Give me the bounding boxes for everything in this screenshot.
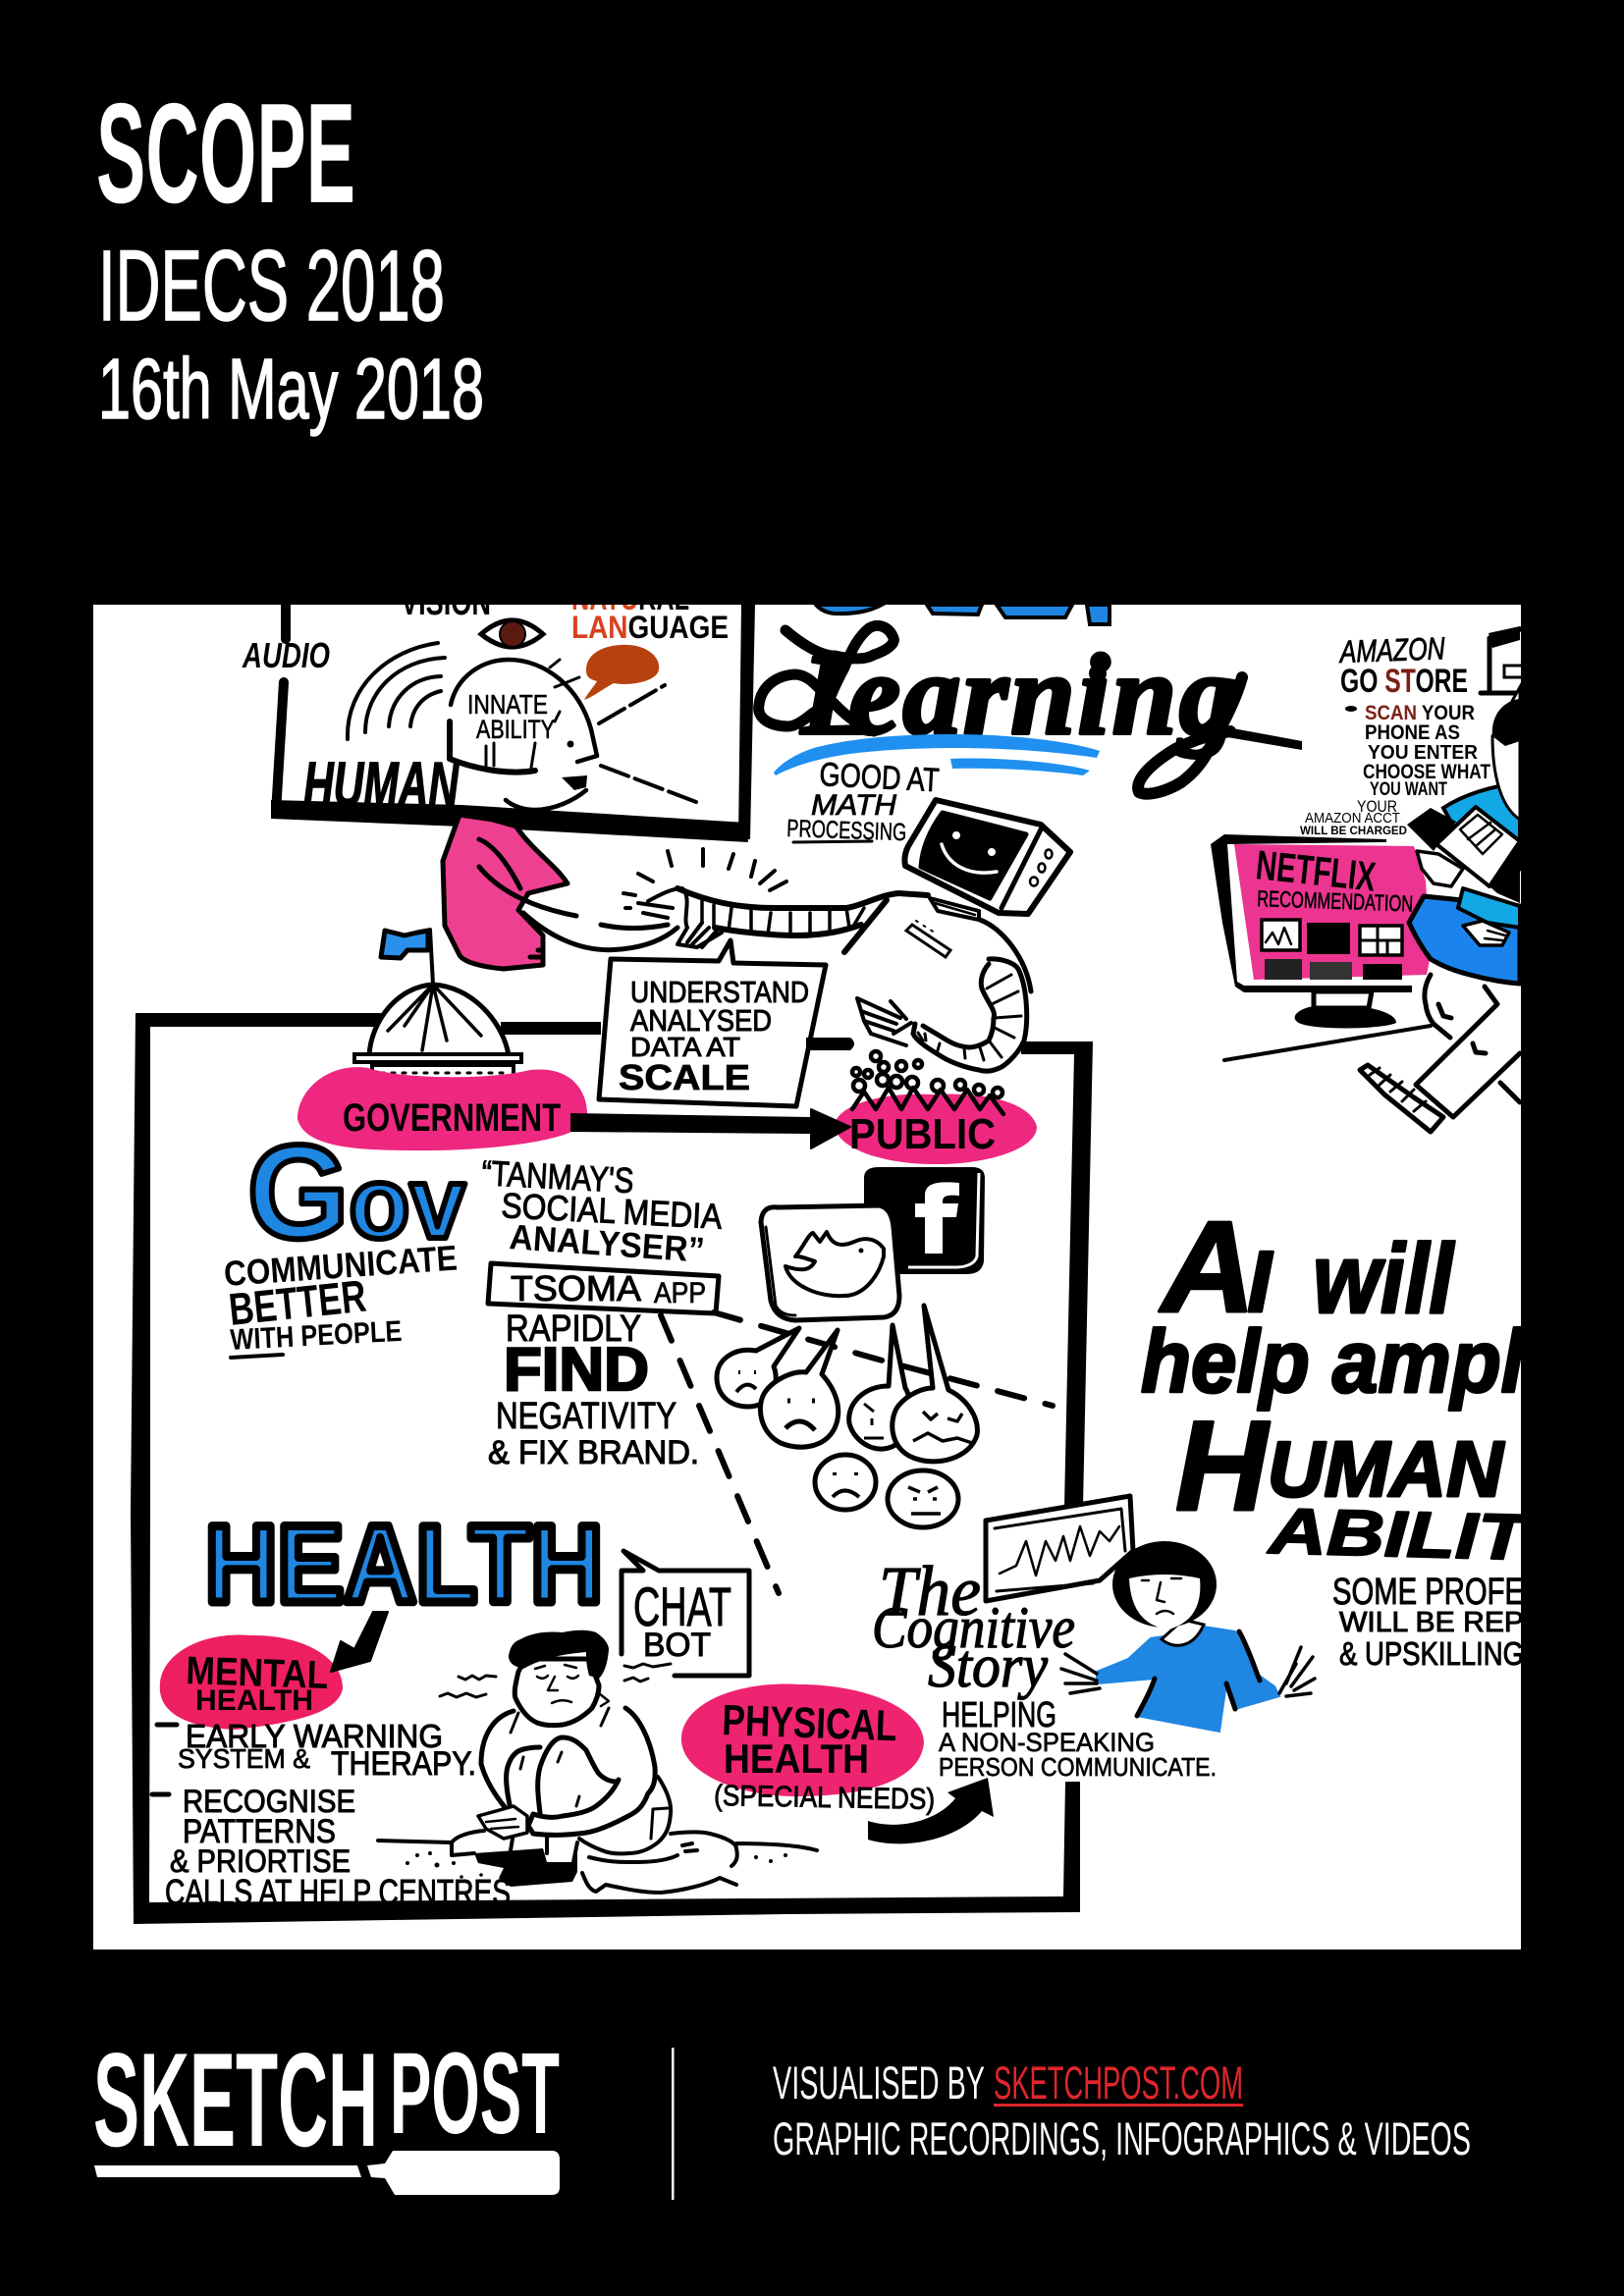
logo: pen mark (94, 2151, 560, 2195)
text: tanmay's social media analyser: “TANMAY'S (481, 1152, 635, 1201)
box: tsoma app: APP (654, 1277, 706, 1309)
icon: store building (1481, 626, 1524, 693)
heading: gov: Gov (247, 1117, 465, 1266)
face 3 (849, 1325, 910, 1449)
heading: AI will help amplify human ability: UMAN (1268, 1425, 1505, 1513)
callout: understand analysed data at scale: ANALYSED (630, 1003, 772, 1038)
face 4 (893, 1306, 977, 1462)
main content frame (131, 1013, 1093, 1924)
heading: AI will help amplify human ability: help ampl (1141, 1313, 1526, 1412)
heading: AI will help amplify human ability: AI (1159, 1195, 1272, 1339)
text: amazon go store: YOUR (1357, 797, 1397, 816)
footer logo: sketchpost: SKETCH (93, 2025, 378, 2174)
icon: eye (481, 620, 543, 647)
face 2 (760, 1330, 839, 1447)
sand dots (406, 1851, 787, 1879)
text: innate: INNATE (467, 689, 548, 720)
shopper: jacket (1409, 896, 1520, 984)
label: vision: VISION (401, 582, 491, 623)
robot body (857, 920, 1031, 1071)
shopper: legs (1416, 975, 1520, 1117)
bubble: chat bot (622, 1551, 749, 1676)
pill: public (835, 1094, 1037, 1164)
text: tanmay's social media analyser: ANALYSER” (508, 1216, 706, 1270)
heading: AI will help amplify human ability (1141, 1195, 1533, 1672)
heading: learning: Learning (800, 630, 1239, 759)
footer credits (773, 2056, 1471, 2164)
bubble: chat bot: CHAT (633, 1575, 731, 1637)
presenter: hands (1061, 1647, 1315, 1696)
heading: AI will help amplify human ability: & UPSKILLING (1339, 1635, 1524, 1672)
text: good at math processing: MATH (811, 789, 896, 822)
box: tsoma app (488, 1263, 719, 1313)
heading: AI will help amplify human ability: SOME PROFE (1332, 1572, 1524, 1613)
pill: government (298, 1067, 587, 1150)
human head (449, 660, 597, 810)
text: amazon go store: CHOOSE WHAT (1363, 761, 1490, 783)
heading: AI will help amplify human ability: H (1175, 1394, 1268, 1537)
callout: understand analysed data at scale: SCALE (619, 1057, 750, 1097)
robot hand (857, 998, 911, 1045)
monitor: netflix (1211, 834, 1431, 1028)
pill: mental health (160, 1635, 343, 1730)
crowd (852, 1051, 1003, 1114)
bubble: chat bot: BOT (643, 1627, 711, 1664)
shopper: face and hair (1492, 687, 1520, 820)
text: tanmay's social media analyser (483, 1160, 723, 1261)
face 5 (815, 1455, 876, 1510)
label: audio: AUDIO (242, 635, 330, 675)
pill: public: PUBLIC (849, 1110, 996, 1158)
pill: mental health: MENTAL (186, 1649, 329, 1697)
footer credits: SKETCHPOST.COM (994, 2056, 1243, 2109)
list: mental health points: THERAPY. (331, 1745, 476, 1783)
sitting man (378, 1630, 817, 1893)
text: amazon go store: SCAN YOUR (1365, 702, 1475, 724)
heading: AI will help amplify human ability: will (1313, 1224, 1455, 1334)
panel: human frame (242, 580, 755, 842)
text: amazon go store: WILL BE CHARGED (1300, 824, 1407, 837)
panel: sketchnote illustration (93, 580, 1533, 1949)
man: head (514, 1659, 599, 1726)
text: amazon go store (1300, 630, 1490, 837)
robot arm (677, 888, 928, 952)
pill: physical health: PHYSICAL (722, 1696, 897, 1750)
text: amazon go store: YOU WANT (1370, 779, 1447, 800)
heading: the cognitive story: Story (928, 1633, 1048, 1700)
arrow: government to public (571, 1109, 850, 1148)
text: helping a non-speaking person communicate: A NON-SPEAKING (939, 1728, 1155, 1757)
netflix thumbnails (1262, 920, 1402, 980)
label: natural language: NATURAL (571, 580, 689, 617)
text: communicate better with people: BETTER (227, 1270, 368, 1335)
text: amazon go store: AMAZON ACCT (1305, 810, 1400, 827)
man: body (481, 1708, 671, 1853)
text: amazon go store: YOU ENTER (1368, 742, 1479, 764)
heading: health: HEALTH (205, 1503, 603, 1626)
man: legs (511, 1838, 577, 1862)
heading: AI will help amplify human ability: ABILIT (1266, 1494, 1533, 1574)
text: good at math processing: PROCESSING (786, 815, 907, 846)
text: rapidly find negativity and fix brand: NEGATIVITY (496, 1396, 677, 1437)
heading: AI will help amplify human ability: WILL BE REP (1339, 1607, 1524, 1638)
monitor: netflix: RECOMMENDATION (1257, 885, 1414, 917)
dashed face lines (599, 685, 696, 802)
pill: physical health: HEALTH (724, 1735, 869, 1782)
list: mental health points (152, 1718, 511, 1912)
label: natural language: LANGUAGE (571, 610, 729, 645)
text: tanmay's social media analyser: SOCIAL MEDIA (501, 1185, 723, 1237)
list: mental health points: SYSTEM & (178, 1743, 310, 1774)
desk line (1224, 1026, 1431, 1060)
callout: understand analysed data at scale: DATA AT (630, 1032, 740, 1062)
list: mental health points: & PRIORTISE (170, 1843, 351, 1879)
face 1 (717, 1328, 799, 1407)
hand (638, 888, 722, 947)
text: rapidly find negativity and fix brand: FIND (504, 1336, 649, 1404)
man: shoes (474, 1842, 577, 1887)
shopper: phone tablet (1407, 808, 1456, 851)
pill: physical health (681, 1684, 935, 1816)
heading: learning (759, 625, 1302, 794)
label: natural language (573, 605, 728, 638)
shopper: hands (1417, 851, 1463, 886)
date: 16th May 2018 (98, 342, 484, 437)
text: rapidly find negativity and fix brand (488, 1308, 699, 1471)
text: good at math processing (787, 762, 940, 844)
footer divider (672, 2048, 674, 2200)
robot arm tube (913, 959, 1027, 1071)
negative sentiment faces (717, 1306, 977, 1527)
icon: facebook (864, 1167, 985, 1274)
text: ability: ABILITY (476, 715, 555, 744)
man: hand (478, 1806, 527, 1839)
sound waves (348, 643, 445, 739)
callout: understand analysed data at scale (599, 940, 826, 1106)
face 6 (888, 1470, 958, 1527)
text: amazon go store: AMAZON (1337, 630, 1446, 669)
list: mental health points: EARLY WARNING (186, 1718, 443, 1754)
arrow: health to mental health (331, 1612, 388, 1672)
label: human: HUMAN (303, 749, 460, 820)
dashed connector lines (661, 1312, 1053, 1593)
text: helping a non-speaking person communicate (939, 1694, 1217, 1782)
arrow: curved to cognitive story (868, 1778, 994, 1843)
text: helping a non-speaking person communicate: HELPING (942, 1694, 1056, 1735)
heading: the cognitive story: Cognitive (872, 1595, 1075, 1660)
heading: the cognitive story (872, 1552, 1075, 1700)
blue underline strokes (774, 734, 1100, 775)
text: communicate better with people: WITH PEOPLE (230, 1315, 403, 1357)
text: rapidly find negativity and fix brand: & FIX BRAND. (488, 1434, 699, 1471)
footer logo: sketchpost: POST (390, 2029, 560, 2159)
pill: government: GOVERNMENT (343, 1096, 561, 1140)
list: mental health points: PATTERNS (183, 1813, 336, 1850)
amazon shopper (1360, 687, 1520, 1132)
icon: twitter (761, 1205, 899, 1320)
radiating lines (623, 849, 786, 908)
text: amazon go store: GO STORE (1340, 663, 1468, 700)
monitor: waveform (986, 1496, 1133, 1601)
subtitle: IDECS 2018: IDECS 2018 (98, 230, 445, 342)
text: good at math processing: GOOD AT (819, 756, 940, 799)
pill: physical health: (SPECIAL NEEDS) (714, 1780, 935, 1816)
robot TV head (904, 800, 1070, 920)
worry marks (440, 1664, 671, 1697)
list: mental health points: CALLS AT HELP CENTRES (165, 1872, 511, 1912)
text: helping a non-speaking person communicate: PERSON COMMUNICATE. (939, 1752, 1217, 1782)
list: mental health points: RECOGNISE (183, 1784, 355, 1819)
pill: mental health: HEALTH (195, 1684, 313, 1717)
text: communicate better with people: COMMUNICATE (223, 1237, 459, 1294)
callout: understand analysed data at scale: UNDERSTAND (630, 975, 809, 1009)
shopper: shoe (1360, 1065, 1443, 1132)
presenter in blue (1061, 1541, 1315, 1732)
ground and pillow (378, 1831, 817, 1893)
box: tsoma app: TSOMA (511, 1268, 641, 1308)
text: amazon go store: PHONE AS (1365, 721, 1460, 744)
title block (96, 74, 484, 437)
footer credits: VISUALISED BY (773, 2056, 985, 2109)
icon: speech blob (584, 645, 659, 700)
text: rapidly find negativity and fix brand: RAPIDLY (506, 1308, 641, 1350)
monitor: netflix: NETFLIX (1254, 841, 1378, 900)
heading: the cognitive story: The (879, 1552, 981, 1630)
title: SCOPE: SCOPE (96, 74, 355, 233)
heading: deep (cropped) (816, 605, 1110, 624)
text: communicate better with people (223, 1237, 459, 1358)
icon: government dome (354, 930, 521, 1082)
presenter: head (1112, 1541, 1217, 1628)
human figure with pink shirt (443, 810, 722, 969)
